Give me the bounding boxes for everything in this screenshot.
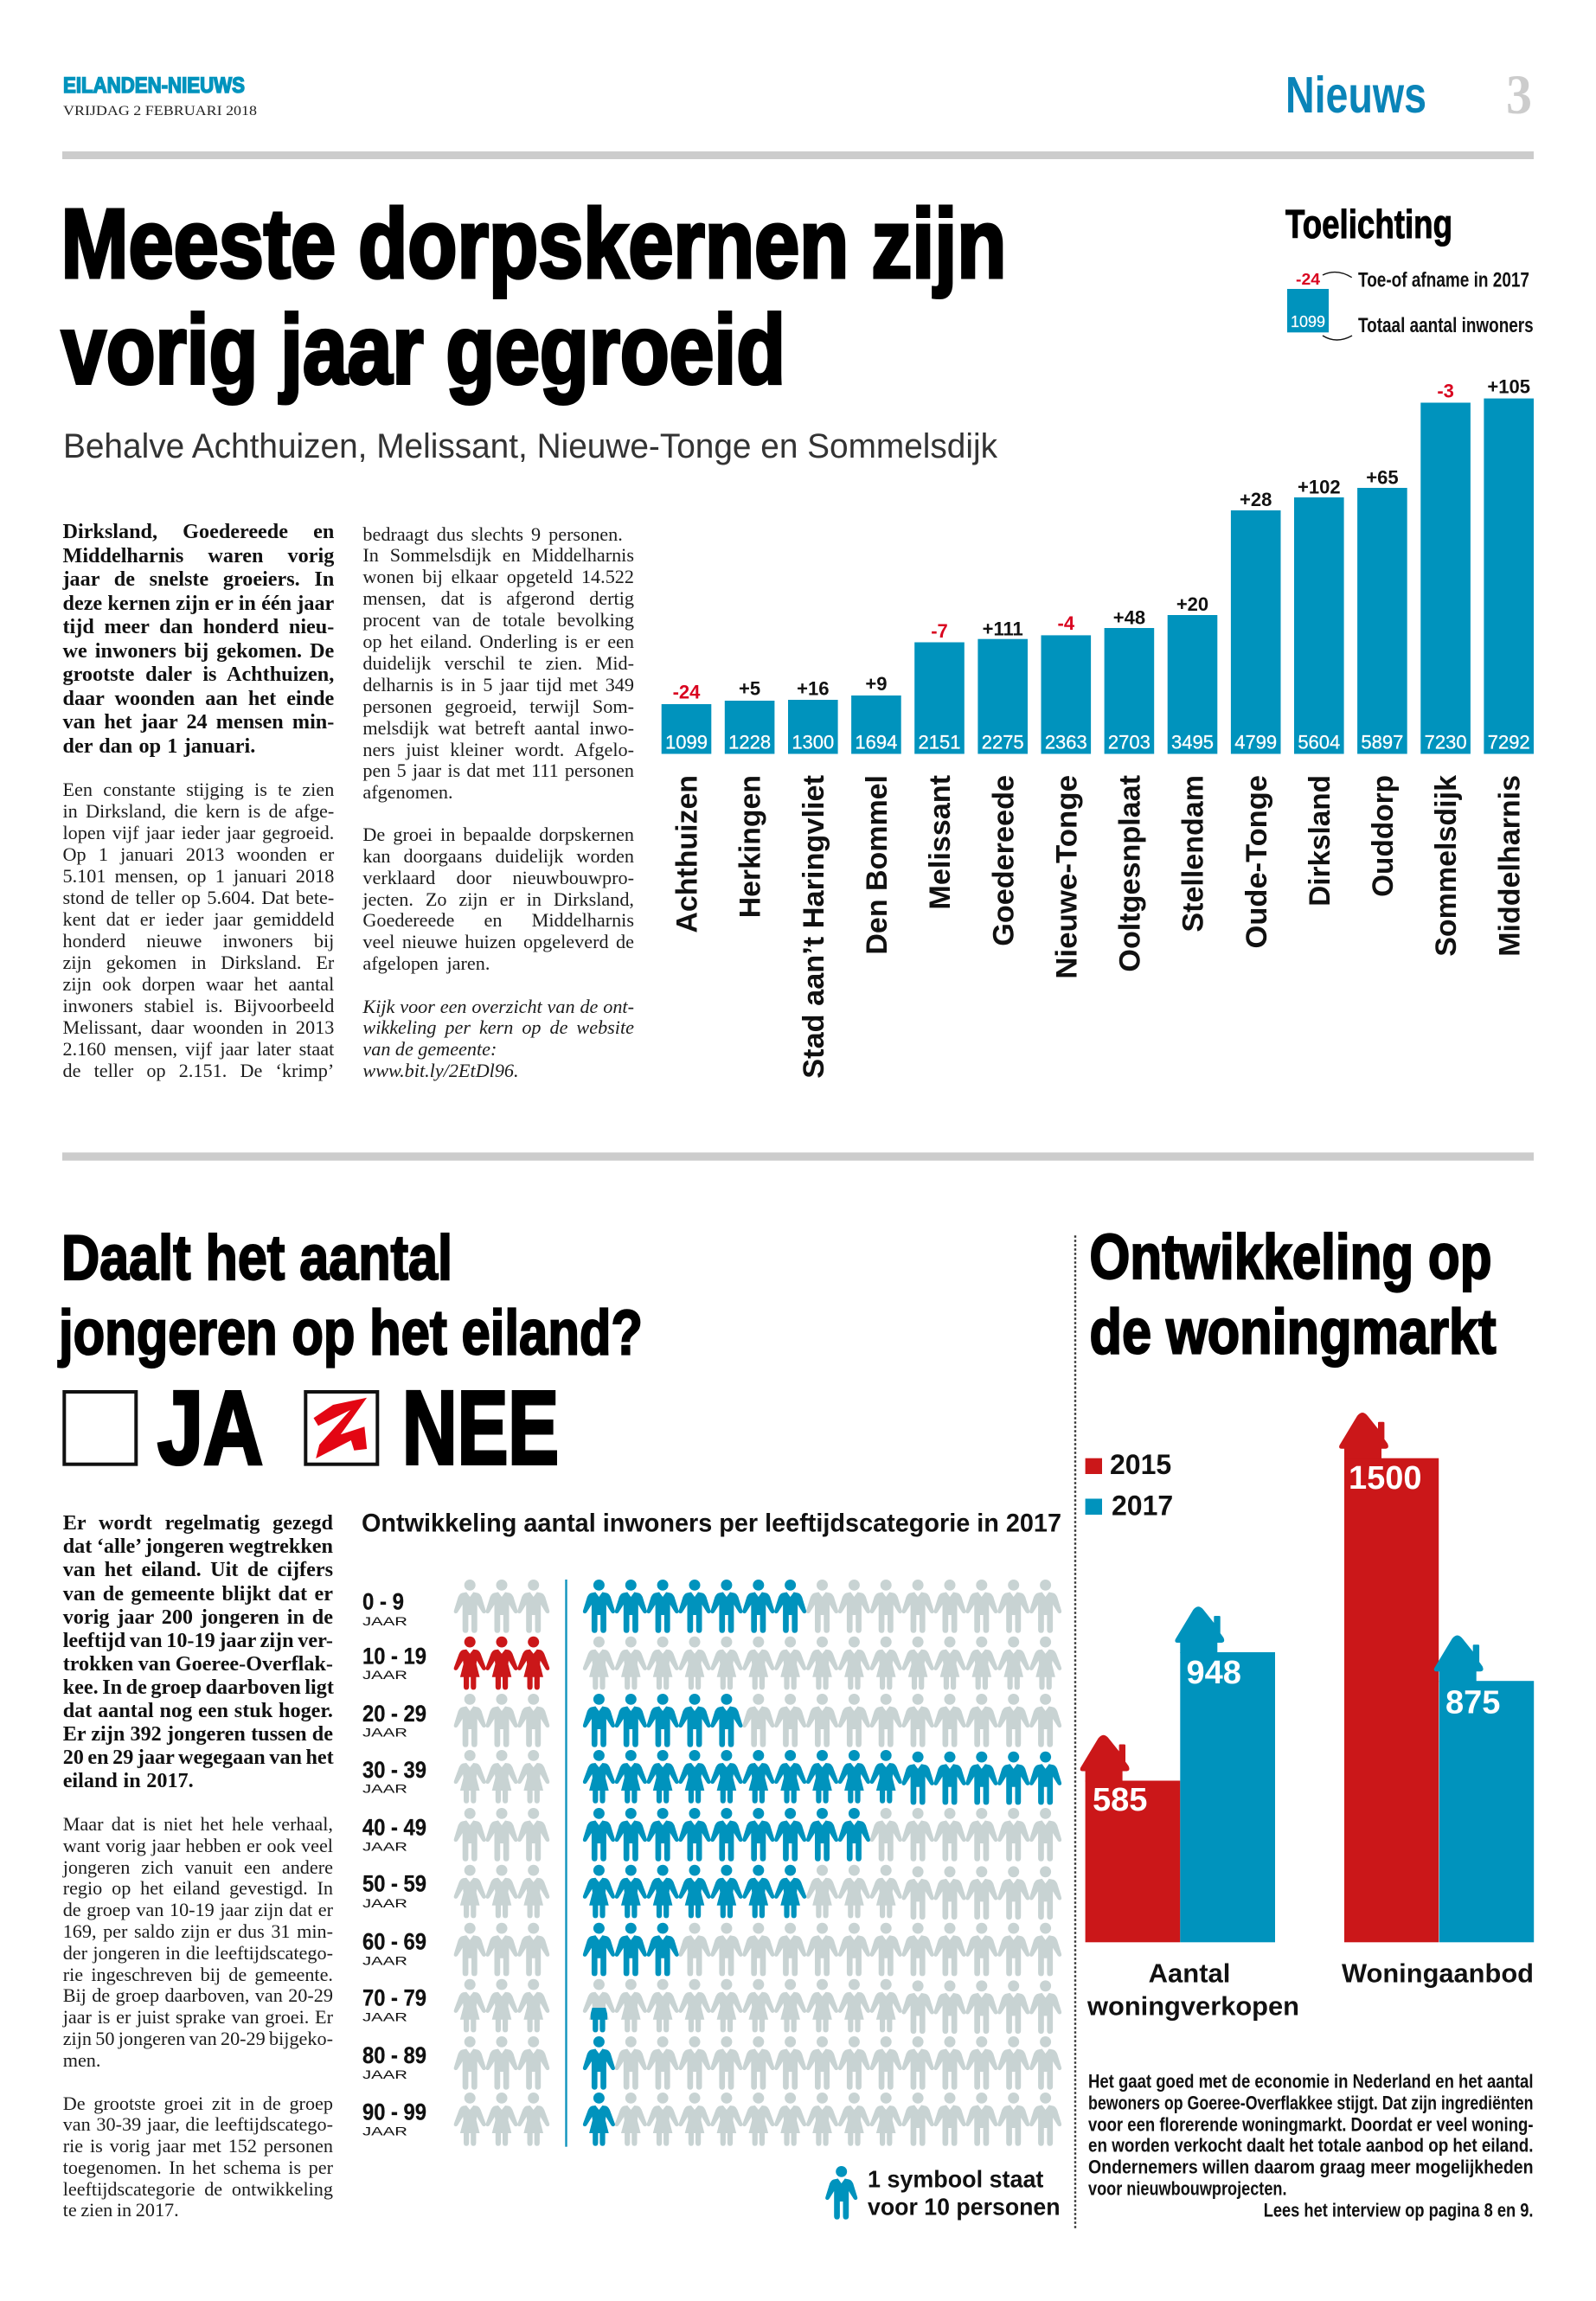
article text: column 1: lopen vijf jaar ieder jaar gegroeid. [62,822,334,843]
article text: column 2 middle: De groei in bepaalde dorpskernen [362,824,634,845]
label 0-9: JAAR [362,1615,407,1628]
article text: column 2 top: bedraagt dus slechts 9 personen. [362,522,623,545]
bar: Ouddorp: 5897 [1361,732,1403,753]
article text: column 1: stond de teller op 5.604. Dat bete- [62,887,334,908]
article text: website note: wikkeling per kern op de website [362,1016,634,1038]
bar: verkopen 2015 [1080,1735,1180,1942]
article intro: dorpskernen: der dan op 1 januari. [62,734,255,758]
checkbox: NEE with red mark [305,1368,559,1486]
label 30-39: 30 - 39 [362,1757,426,1783]
bar: Den Bommel: Den Bommel [861,775,894,955]
article text: website note: Kijk voor een overzicht van de ont- [362,995,634,1017]
bar: Oude-Tonge: 4799 [1234,732,1277,753]
article text: column 2 top: melsdijk wat betreft aantal inwo- [362,717,634,739]
bar: Goedereede: 2275 [982,732,1024,753]
label 80-89: 80 - 89 [362,2042,426,2068]
label 40-49 [362,1815,426,1853]
article text: column 2 middle: Goedereede en Middelharnis [362,909,634,931]
article text: column 2 top: afgenomen. [362,781,453,803]
article text: jongeren paragraph 2: Maar dat is niet het hele verhaal, [63,1813,333,1835]
legend: years [1086,1449,1173,1521]
article text: jongeren paragraph 2: want vorig jaar hebben er ook veel [63,1835,333,1856]
article text: column 1: 2.160 mensen, vijf jaar later staat [62,1038,334,1060]
text block: woningmarkt: Lees het interview op pagina 8 en 9. [1264,2200,1533,2221]
bar: Oude-Tonge: Oude-Tonge [1240,775,1273,948]
row 90-99 [454,2093,1061,2146]
article text: jongeren paragraph 2: men. [63,2049,100,2071]
row 20-29 [454,1694,1061,1747]
label: aantal woningverkopen: woningverkopen [1086,1990,1299,2021]
article text: column 2 top [362,522,634,803]
article text: column 1: in Dirksland, die kern is de afge- [62,800,334,822]
label 60-69: 60 - 69 [362,1928,426,1954]
label: woningaanbod: Woningaanbod [1342,1958,1534,1988]
legend: years: 2017 [1112,1490,1173,1521]
article text: jongeren paragraph 2: jongeren zich vanuit een andere [63,1856,333,1878]
article text: column 2 middle: kan doorgaans duidelijk worden [362,845,634,867]
icon: person symbol [825,2166,857,2220]
article intro: dorpskernen: Middelharnis waren vorig [62,543,334,567]
bar: Stellendam: 3495 [1171,732,1214,753]
pictogram chart: personen per leeftijd [454,1580,1061,2147]
icon: red check mark [313,1398,367,1458]
label: aantal woningverkopen: Aantal [1149,1958,1230,1988]
article text: column 2 middle: jecten. Zo zijn er in Dirksland, [362,888,634,910]
article text: column 2 middle: veel nieuwe huizen opgeleverd de [362,931,634,952]
label 10-19 [362,1643,426,1682]
chart: woningaanbod: 1500 [1349,1460,1422,1497]
legend: years: 2015 [1110,1449,1171,1480]
article text: jongeren paragraph 2: Bij de groep daarboven, van 20-29 [63,1984,333,2006]
article text: column 2 top: delharnis is in 5 jaar tijd met 349 [362,674,634,695]
title: vorig jaar gegroeid [61,295,785,404]
article text: column 2 top: duidelijk verschil te zien. Mid- [362,652,634,674]
article text: column 1: zijn gekomen in Dirksland. Er [62,952,334,973]
bar: Ouddorp: Ouddorp [1367,775,1400,897]
label 30-39 [362,1757,426,1796]
bar: Goedereede: +111 [983,618,1023,639]
label 50-59: 50 - 59 [362,1871,426,1897]
label 70-79: 70 - 79 [362,1984,426,2010]
legend sample bar [1287,271,1329,332]
bar: Dirksland: 5604 [1298,732,1340,753]
article text: column 2 top: ners juist kleiner wordt. Afgelo- [362,739,634,760]
article intro: jongeren: van het eiland. Uit de cijfers [63,1558,333,1581]
article intro: dorpskernen: jaar de snelste groeiers. In [62,567,334,591]
bar: Stad aan't Haringvliet [788,678,838,1079]
bar: Nieuwe-Tonge: Nieuwe-Tonge [1050,775,1083,979]
label: aantal woningverkopen [1086,1958,1299,2021]
legend heading: Toelichting [1285,202,1452,247]
row 0-9 [454,1580,1061,1633]
bar: Middelharnis [1484,376,1534,957]
article intro: dorpskernen: Dirksland, Goedereede en [62,520,334,543]
bar: Sommelsdijk: Sommelsdijk [1430,775,1463,957]
label 20-29 [362,1701,426,1740]
article text: jongeren paragraph 2: der jongeren in die leeftijdscatego- [63,1942,333,1964]
bar: Achthuizen: 1099 [665,732,708,753]
heading: woningmarkt: de woningmarkt [1090,1298,1497,1368]
chart: woningaanbod [1339,1413,1534,1988]
bar: verkopen 2017 [1175,1606,1275,1942]
article text: column 2 middle: afgelopen jaren. [362,952,490,974]
article text: jongeren paragraph 2: jaar is er juist sprake van groei. Er [63,2006,333,2028]
article text: column 1: de teller op 2.151. De ‘krimp’ [62,1060,334,1081]
article intro: jongeren: dat ‘alle’ jongeren wegtrekken [63,1535,333,1558]
article text: website note: www.bit.ly/2EtDl96. [362,1060,519,1081]
article text: column 1: Melissant, daar woonden in 2013 [62,1016,334,1038]
label 90-99 [362,2099,426,2138]
article text: jongeren paragraph 3: De grootste groei zit in de groep [63,2092,333,2114]
bar: Ouddorp [1357,466,1407,897]
bar: Goedereede: Goedereede [987,775,1020,946]
bar: Ooltgesnplaat: +48 [1113,606,1145,628]
masthead logo: EILANDEN-NIEUWS [63,74,245,98]
article intro: jongeren: Er zijn 392 jongeren tussen de [63,1722,333,1746]
heading: jongeren: jongeren op het eiland? [57,1298,643,1368]
article intro: jongeren: vorig jaar 200 jongeren in de [63,1606,333,1629]
article text: website note [362,995,634,1081]
bar: Sommelsdijk [1420,381,1471,957]
pictogram key: 1 symbool staat [868,2165,1043,2192]
bar: Herkingen: Herkingen [734,775,767,918]
article text: column 1: kent dat er ieder jaar gemiddeld [62,908,334,930]
bar: Stellendam: +20 [1176,593,1208,615]
label 70-79 [362,1984,426,2024]
article text: column 1: Een constante stijging is te zien [62,779,334,799]
article intro: dorpskernen: tijd meer dan honderd nieu- [62,615,334,638]
article intro: jongeren: trokken van Goeree-Overflak- [63,1652,333,1676]
row 80-89 [454,2036,1061,2090]
article intro: jongeren: dat aantal nog een stuk hoger. [63,1699,333,1722]
label 40-49: JAAR [362,1840,407,1853]
label 10-19: 10 - 19 [362,1643,426,1669]
pictogram key [825,2165,1061,2221]
article text: column 2 top: personen gegroeid, terwijl Som- [362,695,634,717]
heading: jongeren: Daalt het aantal [61,1223,452,1293]
article intro: jongeren [62,1511,334,1792]
label 50-59 [362,1871,426,1910]
bar: aanbod 2015 [1339,1413,1439,1942]
article text: column 1: zijn ook dorpen waar het aantal [62,973,334,995]
date line: VRIJDAG 2 FEBRUARI 2018 [63,104,257,119]
label 20-29: 20 - 29 [362,1701,426,1727]
bar: Oude-Tonge [1231,489,1280,948]
label 0-9 [362,1589,407,1628]
article text: jongeren paragraph 2: de groep van 10-19 jaar zijn dat er [63,1899,333,1920]
checkbox: NEE with red mark: NEE [402,1368,559,1486]
article text: column 1: honderd nieuwe inwoners bij [62,930,334,952]
label 80-89: JAAR [362,2068,407,2081]
legend sample bar: 1099 [1291,313,1325,330]
article intro: dorpskernen: van het jaar 24 mensen min- [62,710,334,734]
subtitle: Behalve Achthuizen, Melissant, Nieuwe-Tonge en Sommelsdijk [63,427,998,465]
legend text: total: Totaal aantal inwoners [1358,314,1534,337]
article text: jongeren paragraph 2 [62,1813,333,2071]
bar: Ouddorp: +65 [1366,466,1399,488]
article text: column 1: Op 1 januari 2013 woonden er [62,843,334,865]
row 30-39 [454,1750,1061,1804]
age labels [362,1589,426,2138]
article text: column 2 top: op het eiland. Onderling is er een [362,631,634,652]
article text: jongeren paragraph 3: van 30-39 jaar, die leeftijdscatego- [63,2113,333,2135]
article text: column 1: 5.101 mensen, op 1 januari 2018 [62,865,334,887]
bar: Melissant: 2151 [919,732,960,753]
article intro: jongeren: leeftijd van 10-19 jaar zijn ver- [63,1629,333,1652]
article text: jongeren paragraph 3: leeftijdscategorie de ontwikkeling [63,2178,333,2200]
title: Meeste dorpskernen zijn [61,189,1007,298]
article text: column 1 [62,779,334,1081]
article text: column 2 top: procent van de totale bevolking [362,609,634,631]
bar: Middelharnis: +105 [1487,376,1530,398]
article text: column 2 top: mensen, dat is afgerond dertig [362,587,634,609]
bar: Dirksland: +102 [1298,477,1341,498]
label 40-49: 40 - 49 [362,1815,426,1841]
bar: Nieuwe-Tonge: -4 [1058,612,1075,634]
text block: woningmarkt: Ondernemers willen daarom graag meer mogelijkheden [1088,2157,1533,2178]
bar: Dirksland [1294,477,1344,907]
bar: Melissant: -7 [931,620,948,642]
article text: jongeren paragraph 3 [62,2092,333,2221]
bar: Dirksland: Dirksland [1304,775,1336,907]
bar: Goedereede [977,618,1028,946]
chart: aantal woningverkopen [1080,1606,1299,2021]
pictogram key: voor 10 personen [868,2194,1061,2221]
article text: column 2 middle [362,824,634,974]
bar: Oude-Tonge: +28 [1240,489,1272,510]
article text: jongeren paragraph 3: toegenomen. In het schema is per [63,2157,333,2178]
article intro: jongeren: Er wordt regelmatig gezegd [63,1511,333,1535]
bar: Sommelsdijk: -3 [1437,381,1454,402]
article text: jongeren paragraph 3: te zien in 2017. [63,2199,179,2221]
chart: aantal woningverkopen: 948 [1187,1655,1241,1691]
bar: Ooltgesnplaat [1105,606,1154,972]
row 40-49 [454,1808,1061,1862]
chart: aantal woningverkopen: 585 [1093,1782,1147,1818]
bar: Stellendam [1168,593,1217,933]
article intro: dorpskernen [62,520,334,758]
label 10-19: JAAR [362,1669,407,1682]
article text: jongeren paragraph 2: zijn 50 jongeren van 20-29 bijgeko- [63,2028,333,2049]
row 50-59 [454,1865,1061,1920]
bar: Nieuwe-Tonge: 2363 [1045,732,1087,753]
label 0-9: 0 - 9 [362,1589,404,1615]
article text: jongeren paragraph 2: rie ingeschreven bij de gemeente. [63,1964,333,1985]
label 60-69 [362,1928,426,1968]
text block: woningmarkt [1088,2070,1533,2221]
chart title: leeftijdscategorie: Ontwikkeling aantal inwoners per leeftijdscategorie in 2017 [362,1509,1061,1538]
bar: Herkingen [725,678,774,918]
legend: toelichting [1285,202,1534,340]
article intro: dorpskernen: deze kernen zijn er in één jaar [62,592,334,614]
bar: Middelharnis: Middelharnis [1493,775,1526,957]
article text: column 2 top: pen 5 jaar is dat met 111 personen [362,760,634,781]
page number: 3 [1506,64,1532,126]
chart: woningaanbod: 875 [1445,1684,1500,1721]
checkbox: JA [64,1368,263,1486]
heading: woningmarkt [1090,1222,1497,1368]
title [61,189,1007,404]
article intro: dorpskernen: we inwoners bij gekomen. De [62,638,334,663]
legend sample bar: -24 [1296,271,1320,288]
bar: Achthuizen: -24 [673,682,701,702]
bar: Den Bommel [851,673,901,955]
label 60-69: JAAR [362,1955,407,1968]
bar: Stad aan't Haringvliet: Stad aan’t Haringvliet [798,775,830,1079]
article text: column 2 middle: verklaard door nieuwbouwpro- [362,867,634,888]
article text: jongeren paragraph 3: rie is vorig jaar met 152 personen [63,2135,333,2157]
heading: woningmarkt: Ontwikkeling op [1090,1222,1491,1292]
bar: Ooltgesnplaat: Ooltgesnplaat [1114,775,1147,972]
article text: website note: van de gemeente: [362,1038,497,1060]
label 90-99: JAAR [362,2125,407,2138]
bar: Middelharnis: 7292 [1488,732,1530,753]
article intro: jongeren: van de gemeente blijkt dat er [63,1582,333,1606]
bar: Melissant: Melissant [924,775,957,910]
bar: Sommelsdijk: 7230 [1425,732,1467,753]
label 20-29: JAAR [362,1727,407,1740]
article text: jongeren paragraph 2: regio op het eiland gevestigd. In [63,1877,333,1899]
row 10-19 [454,1637,1061,1689]
checkbox: JA: JA [157,1368,263,1486]
bar: Herkingen: 1228 [728,732,771,753]
article text: jongeren paragraph 2: 169, per saldo zijn er dus 31 min- [63,1920,333,1942]
bar chart: inwoners per kern [662,376,1534,1079]
bar: Melissant [914,620,965,910]
bar: Herkingen: +5 [739,678,760,700]
bar: Achthuizen [662,682,711,933]
article intro: dorpskernen: daar woonden aan het einde [62,687,334,709]
legend connector arcs [1323,272,1352,340]
label 50-59: JAAR [362,1897,407,1910]
article text: column 1: inwoners stabiel is. Bijvoorbeeld [62,995,334,1016]
bar: Den Bommel: +9 [865,673,887,695]
row 60-69 [454,1923,1061,1976]
article intro: jongeren: kee. In de groep daarboven ligt [63,1676,334,1699]
article text: column 2 top: wonen bij elkaar opgeteld 14.522 [362,566,634,587]
row 70-79 [454,1979,1061,2034]
heading: jongeren [57,1223,643,1368]
legend text: change: Toe-of afname in 2017 [1358,269,1529,292]
label 90-99: 90 - 99 [362,2099,426,2125]
bar: Den Bommel: 1694 [855,732,897,753]
bar: Ooltgesnplaat: 2703 [1108,732,1151,753]
article intro: jongeren: eiland in 2017. [63,1769,194,1792]
section name: Nieuws [1285,66,1426,124]
text block: woningmarkt: voor nieuwbouwprojecten. [1088,2177,1287,2199]
text block: woningmarkt: en worden verkocht daalt het totale aanbod op het eiland. [1088,2134,1533,2156]
label 70-79: JAAR [362,2011,407,2024]
article intro: dorpskernen: grootste daler is Achthuizen, [62,663,334,686]
article intro: jongeren: 20 en 29 jaar wegegaan van het [63,1746,334,1769]
bar: Stad aan't Haringvliet: +16 [797,678,829,700]
label 80-89 [362,2042,426,2081]
bar: Achthuizen: Achthuizen [671,775,704,933]
bar: aanbod 2017 [1434,1635,1534,1942]
bar: Nieuwe-Tonge [1042,612,1091,979]
bar: Stellendam: Stellendam [1177,775,1210,933]
article text: column 2 top: In Sommelsdijk en Middelharnis [362,544,634,566]
label 30-39: JAAR [362,1783,407,1796]
bar: Stad aan't Haringvliet: 1300 [792,732,834,753]
